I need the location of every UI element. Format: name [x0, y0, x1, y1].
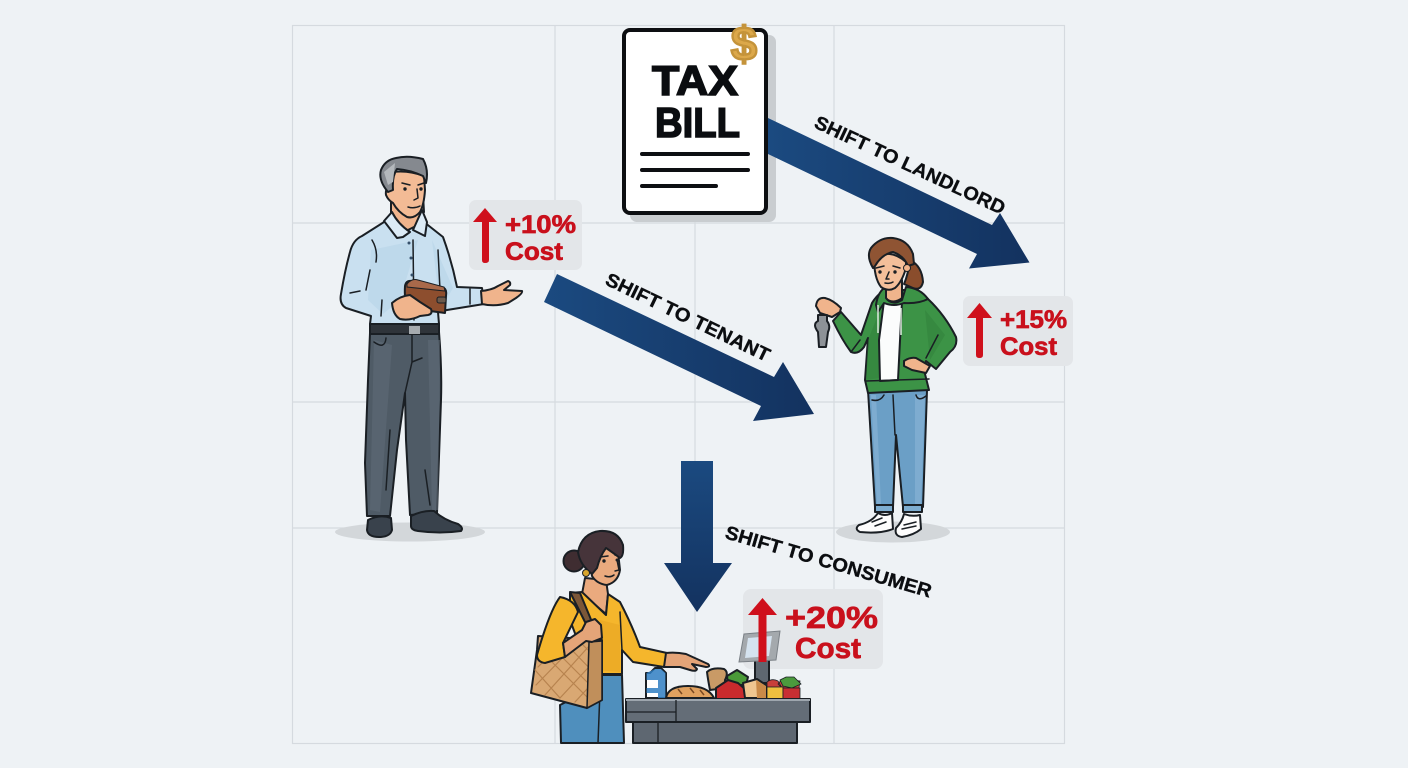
checkout scanner [739, 631, 780, 683]
badge: +10% cost: Cost [505, 238, 564, 266]
belt [370, 324, 439, 334]
icon: up arrow [748, 598, 777, 662]
tote bag [531, 636, 602, 708]
head [590, 546, 620, 585]
left hand and forearm [563, 619, 602, 657]
tomatoes and greens [767, 679, 800, 688]
hoodie [833, 290, 956, 393]
right hand [481, 281, 522, 305]
badge: +20% cost background [743, 589, 883, 669]
face details [402, 183, 424, 208]
badge: +15% cost: Cost [1000, 333, 1058, 361]
hood [876, 287, 928, 312]
badge: +20% cost foreground: +20% [785, 600, 878, 635]
counter top [626, 699, 810, 722]
yellow top [570, 592, 667, 674]
shirt [341, 222, 484, 324]
hand on hip [904, 358, 930, 373]
wallet [405, 281, 446, 313]
groceries [646, 668, 801, 699]
figure: man with wallet [335, 157, 522, 541]
bag strap [570, 592, 592, 624]
checkout counter with groceries [626, 668, 810, 743]
figure: tenant with keys [815, 238, 956, 542]
badge: +20% cost foreground: Cost [795, 633, 861, 665]
reaching hand [664, 653, 709, 671]
bread loaf [743, 679, 766, 698]
tax bill heading [652, 57, 740, 146]
tax bill document [624, 17, 776, 222]
badge: +15% cost: +15% [1000, 306, 1067, 334]
hair [869, 238, 914, 268]
arrow: shift to landlord [768, 118, 1030, 268]
label: shift to landlord: SHIFT TO LANDLORD [811, 112, 1008, 219]
neck [884, 280, 902, 302]
head [874, 254, 906, 290]
sneakers [857, 513, 893, 533]
counter base [633, 722, 797, 743]
tax bill heading: TAX [652, 57, 738, 104]
hair [578, 531, 623, 574]
keys [815, 315, 829, 347]
shoes [367, 516, 392, 537]
earring [582, 570, 590, 576]
left arm [537, 597, 578, 663]
hair [380, 157, 427, 192]
icon: gold dollar sign: $ [731, 17, 757, 70]
badge: +20% cost foreground [748, 598, 878, 665]
label: shift to consumer: SHIFT TO CONSUMER [723, 523, 934, 603]
figure: consumer at checkout [531, 531, 709, 743]
badge: +10% cost: +10% [505, 211, 576, 239]
ponytail [904, 260, 923, 289]
badge: +10% cost [469, 200, 582, 270]
drawstrings [878, 305, 901, 335]
trousers [365, 332, 441, 516]
label: shift to tenant: SHIFT TO TENANT [602, 270, 773, 367]
peppers [727, 670, 748, 685]
icon: up arrow [967, 303, 992, 358]
baguette [666, 686, 714, 698]
milk carton [646, 668, 666, 698]
document text lines [642, 154, 748, 186]
icon: up arrow [473, 208, 497, 263]
left hand [392, 295, 432, 320]
key ring hand [816, 298, 841, 317]
jeans [560, 675, 624, 743]
neck [582, 578, 608, 614]
inner shirt [879, 301, 902, 381]
arrow: shift to consumer [664, 461, 732, 612]
toast [707, 668, 727, 690]
collar [384, 210, 427, 238]
badge: +15% cost [963, 296, 1073, 366]
tax bill heading: BILL [655, 99, 740, 146]
neck and head [391, 195, 424, 232]
arrow: shift to tenant [544, 274, 814, 421]
boxes [767, 687, 783, 699]
jeans [868, 390, 927, 507]
bun [564, 550, 584, 572]
